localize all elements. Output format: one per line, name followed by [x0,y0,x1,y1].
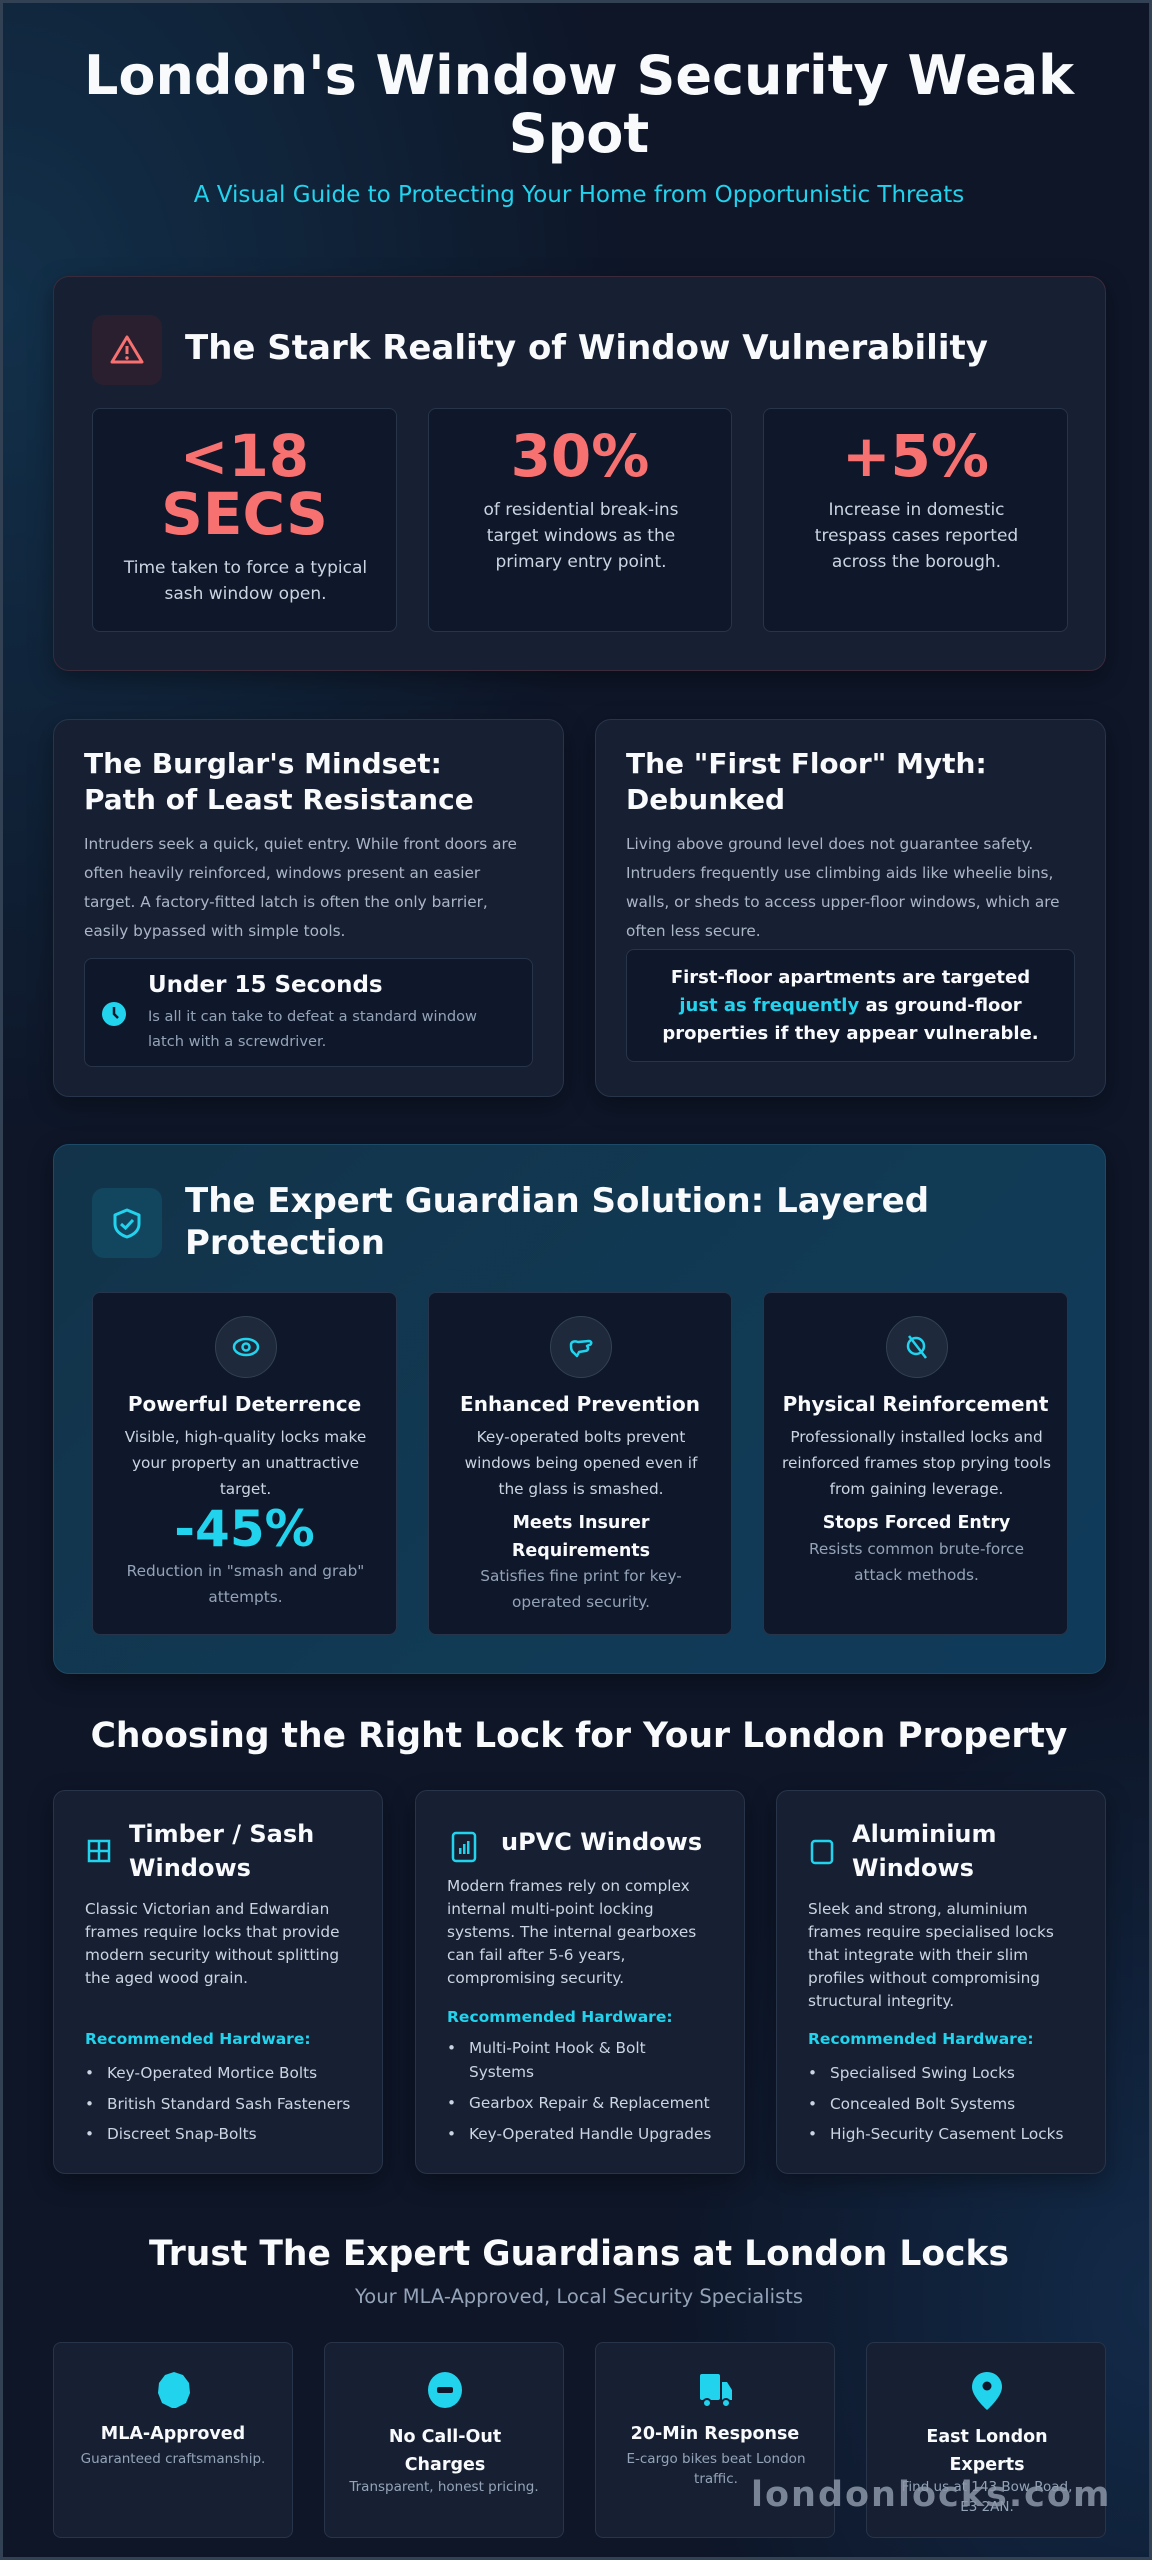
card: timber sash: Key-Operated Mortice Bolts [107,2064,317,2082]
card: timber sash [53,1790,383,2174]
heading [84,747,474,816]
card: prevention: Satisfies fine print for key-operated security. [480,1567,682,1611]
callout: under 15 seconds [84,958,533,1067]
icon: grid window [88,1840,110,1862]
icon: warning [92,315,162,385]
heading: trust: Trust The Expert Guardians at London Locks [149,2234,1009,2274]
badge: east london: Find us at 143 Bow Road, E3 2AN. [902,2479,1072,2515]
card: reinforcement [763,1292,1068,1635]
card: aluminium: Concealed Bolt Systems [830,2094,1015,2112]
badge: east london: East London Experts [926,2427,1048,2475]
title [84,44,1075,165]
card: aluminium: High-Security Casement Locks [830,2125,1064,2143]
stat card: 18 secs: Time taken to force a typical sash window open. [124,558,367,604]
card: aluminium: Specialised Swing Locks [830,2064,1015,2082]
heading: The "First Floor" Myth: [626,747,987,780]
card: aluminium: Windows [852,1854,974,1882]
card: reinforcement: Stops Forced Entry [823,1513,1010,1533]
stat card: 18 secs [92,408,397,632]
callout: under 15 seconds: Under 15 Seconds [148,972,383,998]
heading: The Burglar's Mindset: [84,747,442,780]
card: deterrence: Powerful Deterrence [128,1392,361,1416]
stat card: +5%: Increase in domestic trespass cases reported across the borough. [815,500,1018,572]
card: upvc: Recommended Hardware: [447,2008,673,2026]
card: upvc: Multi-Point Hook & Bolt Systems [469,2039,646,2081]
card: reinforcement: Physical Reinforcement [783,1392,1048,1416]
panel: stark reality [53,276,1106,671]
badge: 20-min: E-cargo bikes beat London traffic. [626,2451,806,2487]
icon: minus circle [428,2372,462,2408]
badge: MLA: MLA-Approved [101,2424,245,2444]
heading: choosing the right lock: Choosing the Right Lock for Your London Property [91,1716,1067,1756]
card: prevention: Enhanced Prevention [460,1392,700,1416]
icon: no tool [886,1316,948,1378]
heading: The Expert Guardian Solution: Layered [185,1181,929,1221]
card: timber sash: Discreet Snap-Bolts [107,2125,257,2143]
card: reinforcement: Resists common brute-force attack methods. [809,1540,1024,1584]
subtitle: A Visual Guide to Protecting Your Home from Opportunistic Threats [194,182,964,208]
stat card: 30%: 30% [511,422,649,490]
card: timber sash: Timber / Sash [129,1820,314,1848]
badge: 20-min [595,2342,835,2538]
heading: The Stark Reality of Window Vulnerability [185,328,988,368]
stat card: 30%: of residential break-ins target windows as the primary entry point. [483,500,679,572]
heading [626,747,987,816]
callout: under 15 seconds: Is all it can take to defeat a standard window latch with a screwdriver. [148,1008,477,1050]
card: timber sash: Windows [129,1854,251,1882]
text: Intruders seek a quick, quiet entry. While front doors are often heavily reinforced, windows present an easier target. A factory-fitted latch is often the only barrier, easily bypassed with simple tools. [84,835,517,940]
badge: MLA: Guaranteed craftsmanship. [81,2451,265,2467]
stat card: 18 secs: <18 [180,422,309,490]
card: timber sash: Classic Victorian and Edwardian frames require locks that provide modern security without splitting the aged wood grain. [85,1900,340,1987]
badge: east london [866,2342,1106,2538]
stat card: +5% [763,408,1068,632]
icon: hand [550,1316,612,1378]
icon: truck [700,2374,732,2406]
icon: clock [102,1002,126,1026]
card: deterrence: -45% [174,1500,315,1558]
card: upvc: Modern frames rely on complex internal multi-point locking systems. The internal gearboxes can fail after 5-6 years, compromising security. [447,1877,696,1987]
card: aluminium: Recommended Hardware: [808,2030,1034,2048]
stat card: +5%: +5% [842,422,989,490]
card: timber sash: British Standard Sash Fasteners [107,2094,350,2112]
stat card: 30% [428,408,732,632]
badge: 20-min: 20-Min Response [631,2424,799,2444]
badge: no call-out: No Call-Out Charges [389,2427,501,2475]
card: upvc: Key-Operated Handle Upgrades [469,2125,711,2143]
watermark: londonlocks.com [751,2475,1111,2515]
card: reinforcement: Professionally installed locks and reinforced frames stop prying tools from gaining leverage. [782,1428,1051,1498]
icon: badge [158,2372,190,2408]
badge: MLA [53,2342,293,2538]
badge: no call-out: Transparent, honest pricing. [349,2479,539,2495]
icon: tablet chart [452,1832,476,1862]
panel: burglar mindset [53,719,564,1097]
card: deterrence [92,1292,397,1635]
callout: targeted: First-floor apartments are targeted just as frequently as ground-floor properties if they appear vulnerable. [662,967,1039,1044]
heading: Debunked [626,783,785,816]
panel: expert guardian solution [53,1144,1106,1674]
card: prevention [428,1292,732,1635]
heading [185,1181,929,1263]
subtitle: trust: Your MLA-Approved, Local Security Specialists [355,2285,803,2308]
panel: first floor myth [595,719,1106,1097]
callout: targeted [626,949,1075,1062]
card: aluminium: Sleek and strong, aluminium frames require specialised locks that integrate with their slim profiles without compromising structural integrity. [808,1900,1054,2010]
card: upvc: uPVC Windows [501,1828,702,1856]
icon: eye [215,1316,277,1378]
icon: map pin [972,2372,1002,2410]
stat card: 18 secs: SECS [161,480,328,548]
icon: square window [810,1840,834,1864]
heading: Path of Least Resistance [84,783,474,816]
card: timber sash: Recommended Hardware: [85,2030,311,2048]
title: London's Window Security Weak [84,44,1074,107]
text: Living above ground level does not guarantee safety. Intruders frequently use climbing aids like wheelie bins, walls, or sheds to access upper-floor windows, which are often less secure. [626,835,1060,940]
card: prevention: Key-operated bolts prevent windows being opened even if the glass is smashed. [465,1428,697,1498]
heading: Protection [185,1223,385,1263]
badge: no call-out [324,2342,564,2538]
card: upvc: Gearbox Repair & Replacement [469,2094,710,2112]
title: Spot [509,102,649,165]
card: prevention: Meets Insurer Requirements [512,1513,650,1561]
card: deterrence: Visible, high-quality locks make your property an unattractive target. [125,1428,366,1498]
card: deterrence: Reduction in "smash and grab" attempts. [127,1562,364,1606]
card: aluminium [776,1790,1106,2174]
card: aluminium: Aluminium [852,1820,997,1848]
card: upvc [415,1790,745,2174]
icon: shield [92,1188,162,1258]
